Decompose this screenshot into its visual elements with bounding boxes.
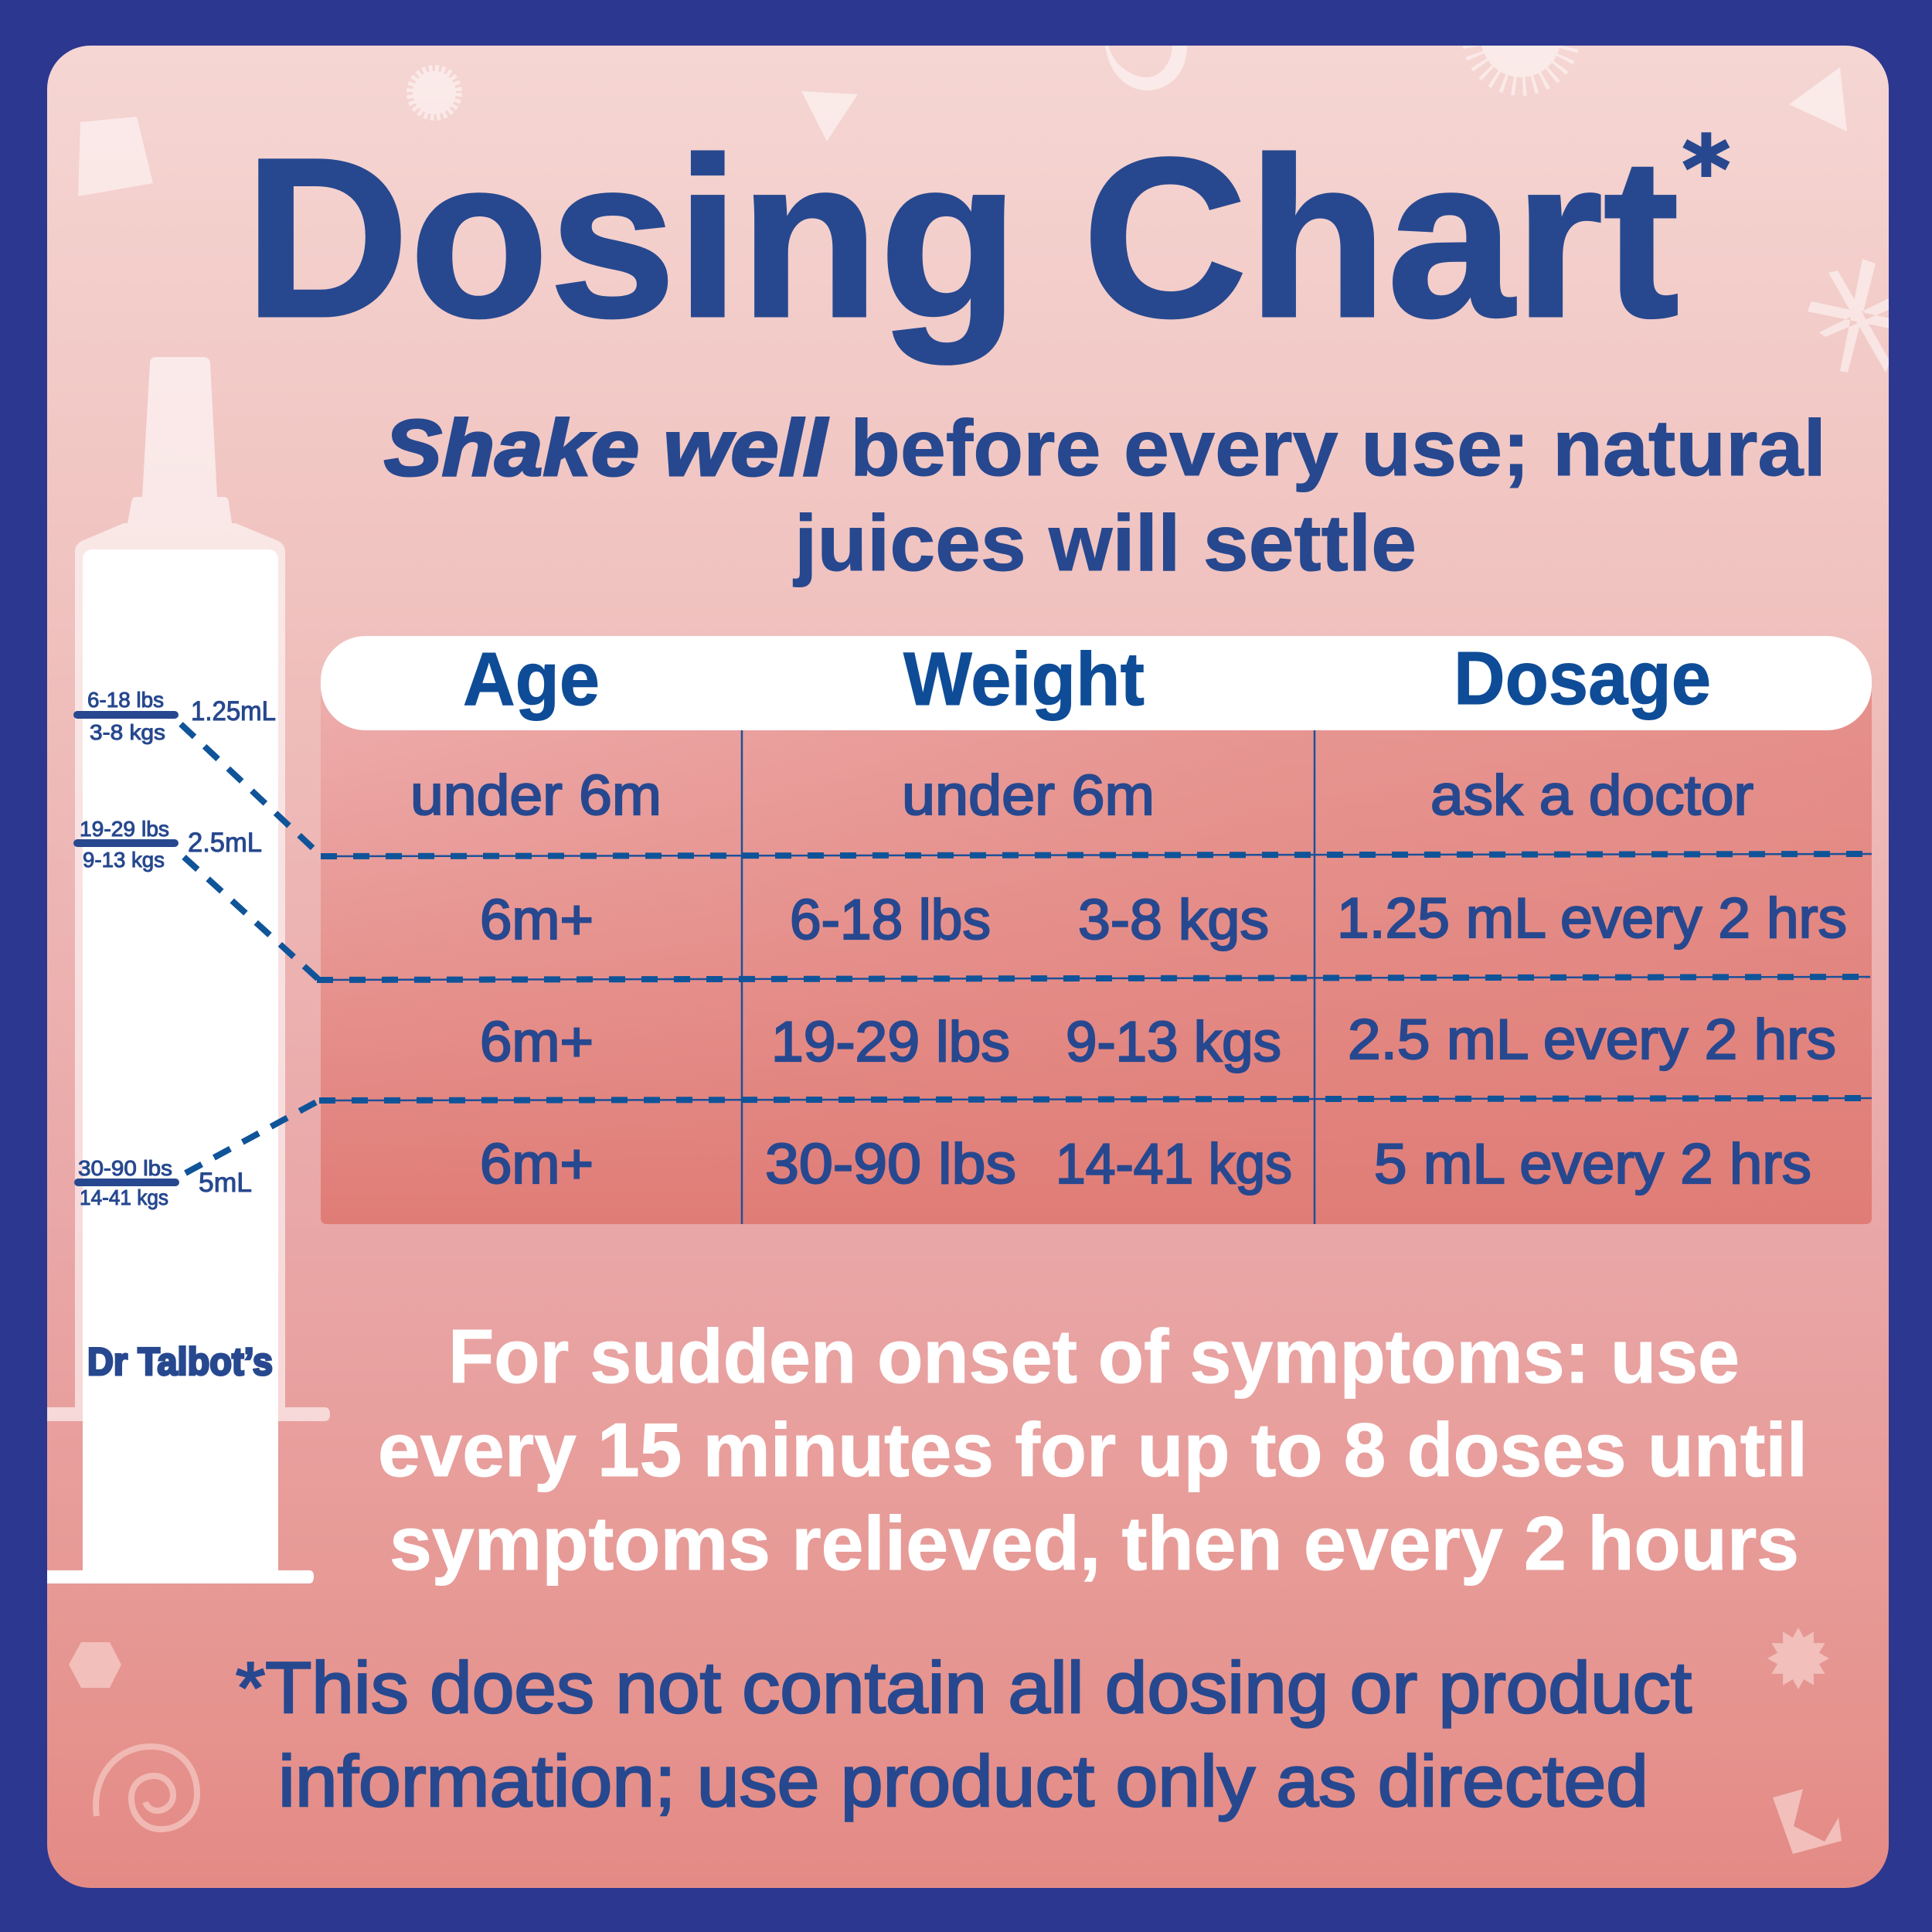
row: 30-90 lbs (480, 1133, 1811, 1196)
shape: angled L (1773, 1789, 1842, 1854)
dose marker 1.25 mL: 1.25mL (191, 696, 276, 726)
row: 19-29 lbs: 19-29 lbs (771, 1011, 1010, 1073)
row: 19-29 lbs: 6m+ (480, 1011, 594, 1073)
dose marker 1.25 mL: 6-18 lbs (87, 688, 164, 712)
subtitle: Shake well (384, 403, 829, 492)
syringe white plunger (47, 549, 314, 1583)
row: 6-18 lbs: 3-8 kgs (1078, 889, 1269, 951)
dose marker 2.5 mL: 9-13 kgs (83, 848, 165, 872)
instructions text (378, 1314, 1808, 1586)
connector dashed lines (181, 724, 320, 1173)
row: 19-29 lbs: 9-13 kgs (1066, 1011, 1281, 1073)
shape: star burst rays (1808, 259, 1890, 372)
dose marker 1.25 mL: 3-8 kgs (90, 720, 165, 744)
dose marker 2.5 mL: 2.5mL (188, 828, 262, 858)
dose marker 2.5 mL (73, 817, 262, 872)
shape: small sunburst (411, 70, 457, 116)
syringe outer barrel (47, 357, 330, 1421)
dose marker 5 mL (74, 1156, 252, 1209)
row: under 6m: under 6m (902, 764, 1155, 827)
syringe (47, 357, 330, 1583)
header pill (321, 636, 1872, 730)
row: 19-29 lbs (480, 1009, 1836, 1073)
row: 30-90 lbs: 14-41 kgs (1056, 1133, 1292, 1196)
dose marker 5 mL: 30-90 lbs (78, 1156, 172, 1180)
subtitle: juices will settle (793, 498, 1417, 587)
row: 6-18 lbs: 6-18 lbs (790, 889, 991, 951)
dose marker 5 mL: 14-41 kgs (80, 1185, 168, 1209)
header labels: Age (463, 637, 600, 721)
instructions text: For sudden onset of symptoms: use (448, 1314, 1740, 1399)
title: Dosing Chart (244, 111, 1679, 366)
footnote: *This does not contain all dosing or product (236, 1647, 1692, 1728)
footnote (236, 1647, 1692, 1821)
title: * (1682, 116, 1730, 223)
table body (321, 680, 1872, 1224)
subtitle: before every use; natural (850, 403, 1826, 492)
header labels (463, 636, 1711, 721)
dose marker 5 mL: 5mL (199, 1168, 252, 1198)
subtitle (384, 403, 1826, 587)
row: 19-29 lbs: 2.5 mL every 2 hrs (1348, 1009, 1836, 1071)
row: under 6m: ask a doctor (1430, 764, 1753, 827)
row: 6-18 lbs: 6m+ (480, 889, 594, 951)
row: under 6m: under 6m (410, 764, 662, 827)
shape: twelve point star (1767, 1628, 1829, 1689)
row: 30-90 lbs: 5 mL every 2 hrs (1374, 1133, 1811, 1196)
shape: triangle top (801, 91, 858, 141)
dose marker 2.5 mL: 19-29 lbs (80, 817, 169, 841)
row: 6-18 lbs (480, 887, 1847, 951)
shape: quadrilateral (78, 117, 153, 196)
instructions text: every 15 minutes for up to 8 doses until (378, 1407, 1808, 1492)
row: 30-90 lbs: 30-90 lbs (765, 1133, 1016, 1196)
header labels: Weight (903, 637, 1145, 721)
row: under 6m (410, 764, 1753, 827)
shape: right triangle (1789, 67, 1847, 131)
shape: hexagon (69, 1642, 121, 1688)
table (317, 636, 1872, 1224)
row dividers (317, 854, 1872, 1100)
dose marker 1.25 mL (73, 688, 276, 744)
shape: large sunburst (1463, 46, 1578, 96)
footnote: information; use product only as directed (278, 1740, 1648, 1821)
shape: crescent (1105, 46, 1187, 90)
shape: spiral (96, 1747, 197, 1829)
header labels: Dosage (1454, 636, 1711, 720)
instructions text: symptoms relieved, then every 2 hours (389, 1501, 1799, 1586)
row: 6-18 lbs: 1.25 mL every 2 hrs (1337, 887, 1847, 950)
row: 30-90 lbs: 6m+ (480, 1133, 594, 1196)
column dividers (742, 730, 1315, 1224)
brand name: Dr Talbot’s (87, 1340, 273, 1383)
